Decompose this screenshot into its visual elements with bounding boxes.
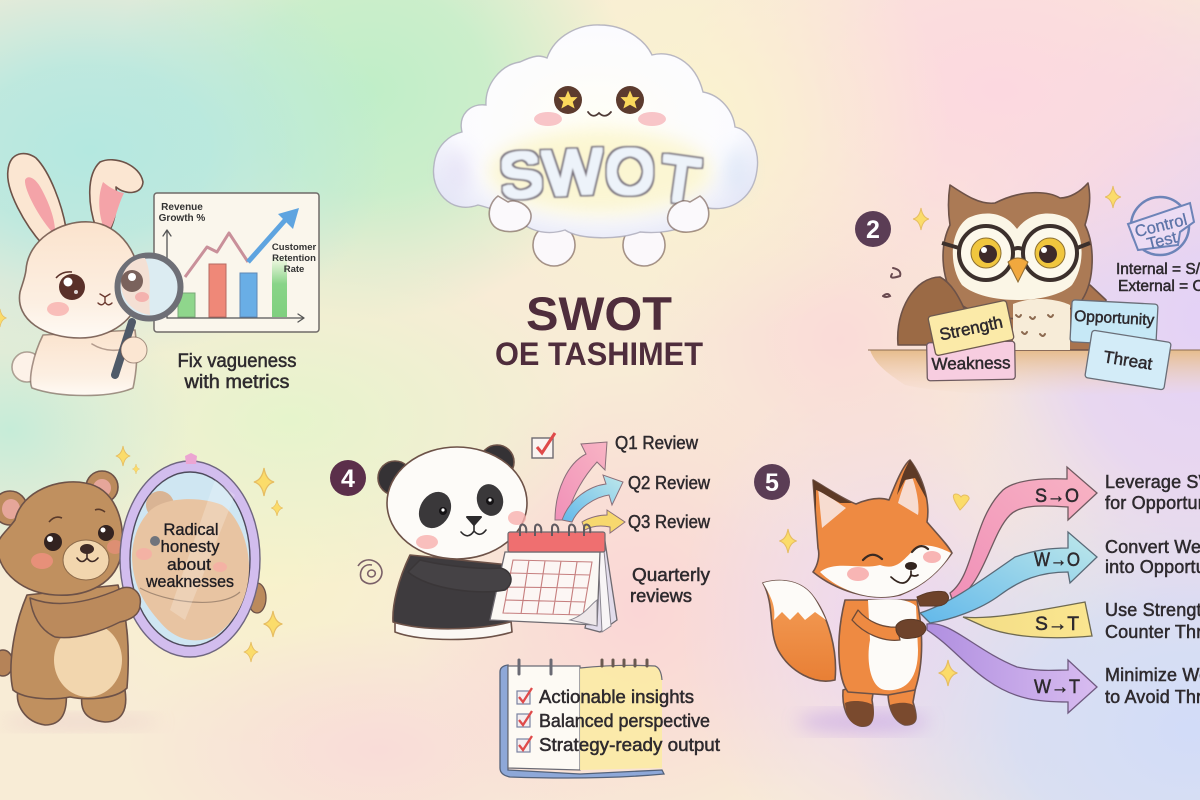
mirror text: about: [167, 555, 211, 574]
chart board: Growth %: [159, 213, 205, 224]
calendar: [490, 525, 617, 632]
sparkles: [913, 186, 1121, 230]
control test stamp: Test: [1145, 229, 1179, 253]
checklist text: Strategy-ready output: [539, 735, 720, 755]
check box: [532, 433, 555, 458]
cloud hands: [489, 196, 709, 232]
card: Threat: Threat: [1102, 347, 1154, 374]
checklist text: Balanced perspective: [539, 711, 710, 731]
chart board: Rate: [284, 264, 304, 275]
rabbit face: [47, 272, 112, 316]
review labels: Q3 Review: [628, 512, 711, 532]
checklist text: Actionable insights: [539, 687, 694, 707]
ribbon: S→T: [963, 602, 1092, 638]
notebook pages: [500, 660, 664, 778]
sparkles and heart: [779, 494, 969, 686]
title: [495, 287, 703, 372]
card: Strength: [928, 300, 1014, 356]
right bear hand: [248, 583, 266, 613]
panel: rabbit with metrics chart: [0, 154, 319, 396]
number badge 5: 5: [765, 469, 779, 497]
magnifying glass: [115, 256, 180, 375]
ribbon: W→O: [920, 532, 1097, 623]
number badge 2: [855, 211, 891, 247]
control test stamp: Control: [1133, 211, 1189, 241]
fox upper paw: [917, 591, 949, 606]
mirror: [120, 453, 260, 657]
fox lower paw: [896, 619, 926, 638]
fox face: [847, 546, 941, 583]
owl glasses and eyes: [942, 226, 1090, 282]
chart board: [154, 193, 319, 332]
panel: panda with calendar: [330, 433, 711, 640]
quarterly caption: [630, 565, 710, 606]
chart board: Retention: [272, 253, 316, 264]
owl: [898, 183, 1106, 350]
panda face: [413, 481, 526, 549]
motion marks: [883, 268, 900, 297]
ribbon labels: [1034, 486, 1080, 698]
panel: owl sorting cards: [855, 183, 1200, 396]
notebook checklist: [500, 660, 720, 778]
caption: [178, 351, 296, 393]
cloud glow: [488, 130, 712, 214]
table: [868, 350, 1200, 396]
cloud SWOT lettering: SWOT: [496, 137, 703, 217]
quarterly caption: Quarterly: [632, 565, 710, 585]
quarterly caption: reviews: [630, 586, 692, 606]
cloud mascot: [433, 25, 758, 266]
review labels: Q1 Review: [615, 433, 699, 453]
card: Weakness: Weakness: [931, 353, 1011, 374]
spiral mark: [358, 560, 382, 584]
subtitle: OE TASHIMET: [495, 336, 703, 372]
review labels: Q2 Review: [628, 473, 711, 493]
ribbon labels: W→T: [1034, 677, 1080, 698]
number badge 4: 4: [341, 465, 355, 493]
cloud side shading: [444, 146, 748, 194]
panel: bear with mirror: [0, 446, 283, 729]
panda: [378, 445, 527, 640]
card: Opportunity: Opportunity: [1074, 308, 1155, 329]
ribbon: W→T: [927, 624, 1097, 713]
fox tail: [763, 581, 836, 681]
card: Threat: [1085, 330, 1171, 390]
review labels: [615, 433, 711, 532]
card: Strength: Strength: [938, 313, 1005, 344]
caption: Fix vagueness: [178, 351, 296, 372]
caption: with metrics: [183, 372, 290, 393]
fox body: [839, 599, 922, 726]
chart board: Customer: [272, 242, 316, 253]
rabbit: [8, 154, 143, 396]
fox lower arm: [852, 610, 900, 640]
title: SWOT: SWOT: [526, 287, 672, 340]
chart board: Revenue: [161, 202, 203, 213]
checklist text: [539, 687, 720, 755]
sparkle: [0, 309, 6, 327]
fox head: [813, 460, 952, 597]
bear face: [31, 509, 123, 580]
number badge 2: 2: [866, 216, 880, 244]
number badge 5: [754, 464, 790, 500]
floor shadow: [0, 715, 160, 729]
ribbon labels: S→T: [1035, 614, 1079, 635]
panel: fox with strategy ribbons: [754, 460, 1200, 732]
mirror text: [145, 520, 234, 591]
fox shadow: [797, 712, 929, 732]
cloud face: [534, 86, 666, 126]
control test stamp: [1128, 197, 1194, 255]
cloud body: [433, 25, 758, 238]
number badge 4: [330, 460, 366, 496]
mirror text: honesty: [160, 537, 220, 556]
cloud feet: [533, 224, 665, 266]
review arrows: [555, 442, 625, 533]
ribbon: S→O: [950, 467, 1097, 602]
card: Weakness: [927, 341, 1015, 381]
rule text: [1116, 261, 1200, 295]
panda arm: [408, 560, 511, 592]
bear arm: [30, 587, 140, 638]
check marks: [517, 688, 532, 752]
sparkles: [116, 446, 283, 662]
mirror text: weaknesses: [145, 572, 234, 591]
rabbit paw: [121, 337, 147, 363]
bear body: [0, 471, 128, 725]
mirror text: Radical: [164, 520, 218, 539]
ribbon labels: W→O: [1034, 550, 1080, 571]
card: Opportunity: [1070, 300, 1158, 346]
ribbon labels: S→O: [1035, 486, 1079, 507]
strategy descriptions: [1105, 472, 1200, 707]
